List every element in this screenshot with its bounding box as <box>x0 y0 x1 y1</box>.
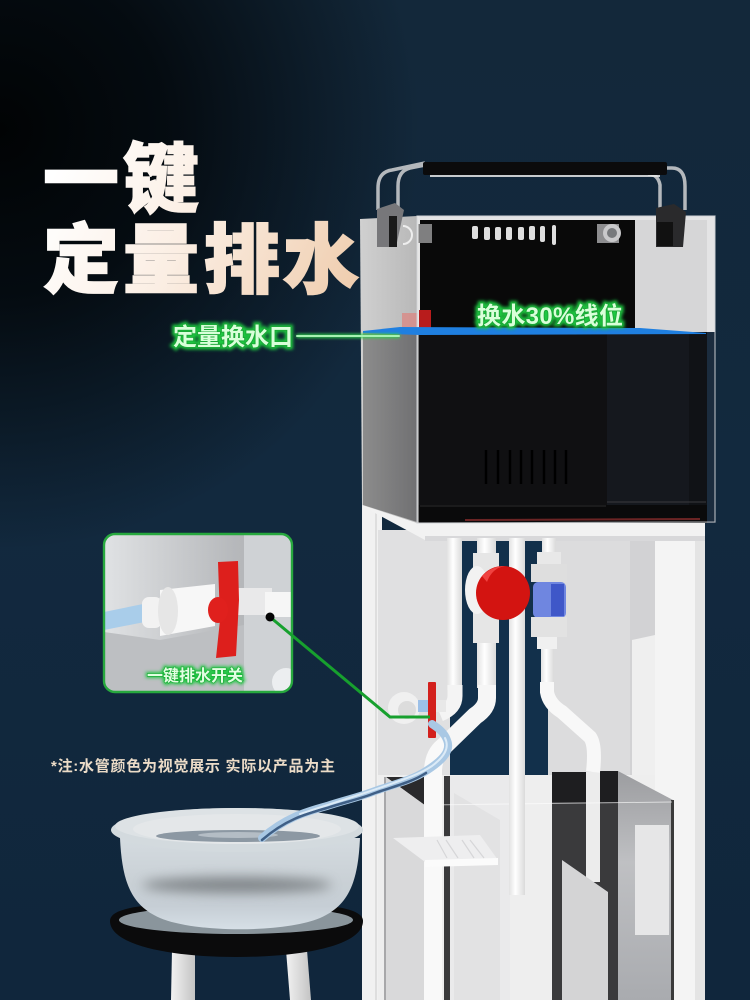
label: water change line: 换水30%线位 <box>477 302 623 330</box>
left post <box>362 505 382 1000</box>
angled drain pipe <box>477 538 496 688</box>
plumbing pipes <box>388 538 594 1000</box>
water body <box>417 332 607 522</box>
inset panel: drain switch <box>104 534 300 696</box>
left clip <box>377 203 404 247</box>
red union handle <box>473 553 499 643</box>
outlet fitting <box>597 224 621 243</box>
drain valve body <box>388 692 420 724</box>
drain hose <box>262 724 448 840</box>
title: 定量排水 <box>43 219 359 304</box>
blue water line <box>363 327 706 335</box>
valve body <box>142 597 162 628</box>
blue hose <box>105 604 142 630</box>
water surface <box>156 830 320 842</box>
center pipe <box>509 538 525 808</box>
LED light with brackets <box>377 162 686 247</box>
perforated tray <box>393 835 498 867</box>
tank edges <box>417 216 715 523</box>
title <box>43 138 359 304</box>
cabinet back: gap <box>450 535 550 775</box>
cabinet back: right panel <box>548 535 630 775</box>
bottom vents <box>486 450 566 484</box>
leader line: drain switch <box>266 612 430 717</box>
right post <box>655 530 695 1000</box>
label: water change line: 换水30%线位 <box>477 302 623 330</box>
title: 一键 <box>43 138 199 223</box>
right clip <box>656 204 686 247</box>
aquarium tank <box>360 216 715 523</box>
inset caption: 一键排水开关 <box>147 666 243 685</box>
left side glass <box>360 216 417 523</box>
left drain pipe <box>447 538 462 690</box>
tall overflow pipe <box>509 800 525 895</box>
right pipe elbow <box>547 682 594 772</box>
red handle <box>208 561 239 658</box>
right pipe upper <box>542 538 556 558</box>
leader line: outlet <box>296 334 400 338</box>
label: quantitative outlet: 定量换水口 <box>173 324 293 351</box>
back panel <box>417 216 715 332</box>
shelf <box>362 505 705 540</box>
lower sump <box>378 771 674 1000</box>
stool <box>110 902 363 1000</box>
cabinet back: left panel <box>378 530 450 775</box>
top vents <box>472 225 556 245</box>
left fitting <box>403 224 432 244</box>
bowl of water <box>111 808 363 929</box>
label: quantitative outlet: 定量换水口 <box>173 324 293 351</box>
blue check valve <box>533 582 566 618</box>
aquarium cabinet stand <box>362 505 705 1000</box>
note: *注:水管颜色为视觉展示 实际以产品为主 <box>51 757 335 775</box>
inset caption: 一键排水开关 <box>147 666 243 685</box>
inner baffle <box>562 860 608 1000</box>
red quantitative port <box>402 310 431 328</box>
